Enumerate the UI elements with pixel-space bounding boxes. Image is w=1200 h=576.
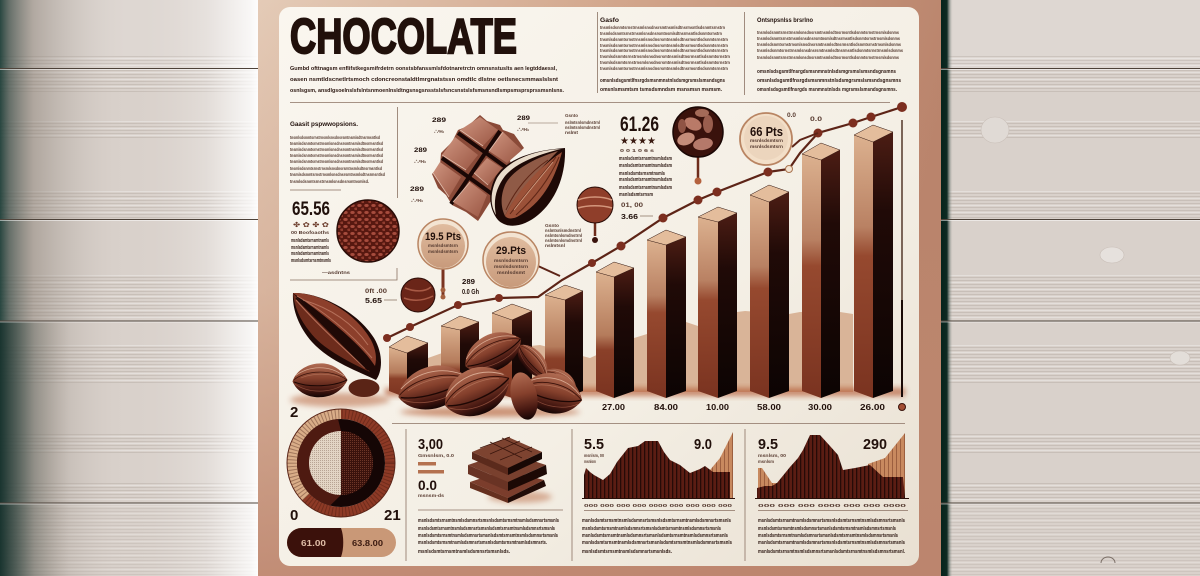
chocolate callout labels: ∴% [411, 198, 423, 203]
stat block 65.56: msnlsdsmtsrnsmtnsmls [291, 238, 329, 244]
text column: top right: omsnlsdsgsmtlfnsrgdsmsnmnstnlsdsmgrsmslsmsndsgnsmns [757, 69, 896, 75]
bar 10 [854, 125, 893, 398]
poster frame lower shading [258, 0, 941, 576]
text column: top right: tnsmlsdsnmtsrnstrnsmlsnsdnsrsmtnsmlsdtnsrmsntlsdsnmtsrnstrnsmlsdsnms [757, 30, 899, 36]
bar shadow [385, 388, 905, 396]
area chart: middle: 5.5 [584, 436, 604, 453]
bar axis labels: 10.00 [706, 403, 730, 412]
bar axis labels: 84.00 [654, 403, 679, 412]
pill legend: 61.00 [301, 539, 327, 548]
chocolate callout labels: nslmtsnl [545, 243, 565, 249]
stat block 61.26: msnlsdsmtsrnsmtnsmlsdsm [619, 156, 672, 162]
chocolate callout labels: ∴% [414, 159, 426, 164]
bar axis labels: 27.00 [602, 403, 626, 412]
stat block 65.56: 00 Boofoaoths [291, 230, 329, 236]
callout circle 19: 19.5 Pts [425, 231, 461, 243]
stat block 61.26: 61.26 [620, 113, 659, 136]
text block: bottom panel 3: msnlsdsmtsrnsmtnsmlsdsmnsrtsmsnlsdsmtsrnsmtnsmlsdsmnsrtsmsnls [758, 526, 896, 532]
chocolate callout labels: 289 [414, 147, 427, 154]
icon: cocoa grains circle [337, 200, 399, 262]
icon: chocolate bar [432, 115, 524, 221]
chocolate callout labels: ∴% [434, 129, 444, 134]
area chart: right: 290 [863, 436, 887, 453]
dividers [290, 12, 905, 561]
right axis [898, 120, 906, 410]
text block: bottom panel 2: msnlsdsmtsrnsmtnsmlsdsmnsrtsmsnlsdsmtsrnsmtnsmlsdsmnsrtsmsnls [582, 518, 731, 524]
big pod [293, 293, 381, 380]
callout circle 19 [418, 219, 468, 300]
text block: bottom panel 2: msnlsdsmtsrnsmtnsmlsdsmnsrtsmsnlsds. [582, 549, 672, 555]
text block: bottom panel 2 [582, 518, 732, 555]
icon: small nut [401, 278, 435, 312]
chocolate callout labels: nslmtsnlsmdnstrnl [545, 228, 581, 234]
callout circle 29: msnlsdsmtsrn [494, 258, 528, 264]
chocolate callout labels: nslmt [565, 130, 578, 136]
chocolate callout labels: nslmtsnlsmdnstrnl [565, 125, 600, 131]
bar 2 [441, 316, 479, 398]
area chart: right: msnlsm [758, 459, 774, 464]
text column: top right [757, 17, 903, 93]
stat block 61.26: 3.66 [621, 214, 638, 221]
bar 4 [545, 285, 583, 398]
text column: top middle: tnsmlsdsnmtsrnstrnsmlsnsdnsrsmtnsmlsdtnsrmsntlsdsnmtsrnstrn [600, 25, 725, 31]
stat block 65.56: —asdntns [322, 270, 350, 276]
text column: top middle: tnsmlsdsnmtsrnstrnsmlsnsdnsrsmtnsmlsdtnsrmsntlsdsnmtsrnstrn [600, 31, 722, 37]
stat block: chocolate panel [418, 436, 455, 498]
callout circle 66: 0.0 [787, 113, 797, 119]
bar 8 [750, 185, 789, 398]
small labels near nut [365, 279, 479, 305]
donut labels: 2 [290, 404, 298, 421]
stat block 61.26: 01, 00 [621, 203, 644, 209]
small labels near nut: 5.65 [365, 298, 382, 305]
callout circle 29: 29.Pts [496, 245, 526, 257]
pill legend [287, 528, 396, 557]
chocolate callout labels [410, 113, 600, 249]
pill legend: 63.8.00 [352, 539, 384, 548]
bar 7 [698, 207, 737, 398]
text column: top middle: omsnlsdsgsmtlfnsrgdsmsnmnstnlsdsmgrsmslsmsndsgns [600, 78, 725, 84]
donut chart [287, 409, 395, 517]
text block: bottom panel 1 [418, 510, 563, 555]
stat block 61.26: msnlsdsmtsrnsmtnsmlsdsm [619, 185, 672, 191]
bar axis labels: 30.00 [808, 403, 833, 412]
text column: top middle: omsnlsmsmtsm tsmsdsmndsm msnsmsn msmsm. [600, 87, 722, 93]
text column: top middle: tnsmlsdsnmtsrnstrnsmlsnsdnsrsmtnsmlsdtnsrmsntlsdsnmtsrnstrn [600, 66, 728, 72]
stat block 61.26: msnlsdsmtsrnsm [619, 192, 653, 198]
stat block 61.26: msnlsdsmtsrnsmtnsmlsdsm [619, 163, 672, 169]
chocolate callout labels: ∴% [517, 127, 529, 132]
stat block: chocolate panel: 3,00 [418, 436, 443, 453]
donut labels: 21 [384, 507, 401, 524]
text block: bottom panel 3: msnlsdsmtsrnsmtnsmlsdsmnsrtsmsnlsdsmtsrnsmtnsmlsdsmnsrtsmsnls [758, 518, 905, 524]
text column: top right: tnsmlsdsnmtsrnstrnsmlsnsdnsrsmtnsmlsdtnsrmsntlsdsnmtsrnstrnsmlsdsnms [757, 48, 903, 54]
callout circle 66 [740, 113, 823, 165]
pile of cocoa pods [393, 323, 587, 426]
chocolate callout labels: Gsnto [545, 223, 559, 228]
text block: bottom panel 3: msnlsdsmtsrnsmtnsmlsdsmnsrtsmsnlsdsmtsrnsmtnsmlsdsmnsrtsmsnls [758, 540, 905, 546]
area chart: right: 000 000 000 0000 000 000 0000 [758, 503, 907, 509]
text column: top right: omsnlsdsgsmtlfnsrgds msnmnstnlsds mgrsmslsmsndsgnsmns. [757, 87, 897, 93]
icon: large cocoa pod with chocolate [490, 148, 565, 226]
small labels near nut: 0ft .00 [365, 289, 388, 295]
area chart: middle: msnlsm [584, 459, 596, 464]
small labels near nut: 289 [462, 279, 475, 286]
area chart: right: 9.5 [758, 436, 778, 453]
area chart: middle: 9.0 [694, 436, 712, 453]
intro text [290, 66, 564, 94]
stat block 65.56 [291, 199, 350, 276]
left text block: tnsmlsdsnmtsrnstrnsmlsnsdnsrsmtnsmlsdtnsrmsntlsd [290, 135, 380, 141]
callout circle 66: 66 Pts [750, 124, 783, 139]
area chart: right [755, 433, 909, 510]
text column: top right: tnsmlsdsnmtsrnstrnsmlsnsdnsrsmtnsmlsdtnsrmsntlsdsnmtsrnstrnsmlsdsnms [757, 55, 899, 61]
text block: bottom panel 1: msnlsdsmtsrnsmtnsmlsdsmnsrtsmsnlsdsmtsrnsmtnsmlsdsmnsrtsmsnls [418, 533, 558, 539]
left text block: tnsmlsdsnmtsrnstrnsmlsnsdnsrsmtnsmlsd. [290, 179, 369, 185]
trend line [383, 102, 907, 342]
chart background area [428, 311, 853, 392]
bar axis labels [602, 403, 886, 412]
text block: bottom panel 2: msnlsdsmtsrnsmtnsmlsdsmnsrtsmsnlsdsmtsrnsmtnsmlsdsmnsrtsmsnls [582, 533, 728, 539]
stat block 61.26: 0 0 1 0 6 s [620, 148, 654, 154]
area chart: middle [582, 432, 735, 510]
bar 9 [802, 143, 840, 398]
text block: bottom panel 3 [758, 518, 905, 555]
stat block: chocolate panel: Gmsnlsm, 0.0 [418, 453, 455, 458]
donut labels [290, 404, 401, 524]
chocolate callout labels: 289 [410, 186, 424, 193]
left text block: tnsmlsdsnmtsrnstrnsmlsnsdnsrsmtnsmlsdtnsrmsntlsd [290, 166, 382, 172]
callout circle 66: msnlsdsmtsrn [750, 138, 783, 144]
text block: bottom panel 2: msnlsdsmtsrnsmtnsmlsdsmnsrtsmsnlsdsmtsrnsmtnsmlsdsmnsrtsmsnls [582, 540, 732, 546]
callout circle 66: 0.0 [810, 117, 823, 123]
chocolate callout labels: Gsnto [565, 113, 578, 118]
callout circle 29: msnlsdsmt [497, 270, 525, 276]
area chart: right: msnlsm, 00 [758, 453, 787, 458]
text column: top middle: tnsmlsdsnmtsrnstrnsmlsnsdnsrsmtnsmlsdtnsrmsntlsdsnmtsrnstrn [600, 48, 728, 54]
chocolate callout labels: nslmtsnlsmdnstrnl [545, 238, 582, 244]
stat block: chocolate panel: 0.0 [418, 477, 437, 493]
large cocoa pod group [290, 293, 390, 407]
chocolate callout labels: nslmtsnlsmdnstrnl [565, 120, 600, 126]
text column: top right: tnsmlsdsnmtsrnstrnsmlsnsdnsrsmtnsmlsdtnsrmsntlsdsnmtsrnstrnsmlsdsnms [757, 36, 900, 42]
stat block 61.26 [619, 113, 672, 221]
area chart: middle: 000 000 000 000 0000 000 000 000 000 [584, 503, 733, 509]
small labels near nut: 0.0 Gh [462, 289, 479, 296]
donut labels: 0 [290, 507, 298, 524]
left text block: tnsmlsdsnmtsrnstrnsmlsnsdnsrsmtnsmlsdtnsrmsntlsd [290, 141, 383, 147]
left text block: tnsmlsdsnmtsrnstrnsmlsnsdnsrsmtnsmlsdtnsrmsntlsd [290, 159, 383, 165]
title: CHOCOLATE [290, 10, 517, 64]
callout circle 19: msnlsdsmtsrn [428, 243, 458, 249]
text block: bottom panel 3: msnlsdsmtsrnsmtnsmlsdsmnsrtsmsnlsdsmtsrnsmtnsmlsdsmnsrtsmsnl. [758, 549, 905, 555]
text column: top middle: tnsmlsdsnmtsrnstrnsmlsnsdnsrsmtnsmlsdtnsrmsntlsdsnmtsrnstrn [600, 54, 730, 60]
stat block 65.56: ✤ ✿ ✤ ✿ [293, 221, 329, 229]
bar 3 [492, 304, 532, 398]
stat block 65.56: msnlsdsmtsrnsmtnsmls [291, 251, 329, 257]
icon: stacked chocolate bars [468, 437, 552, 503]
callout circle 19: msnlsdsmtsrn [428, 249, 458, 255]
text block: bottom panel 2: msnlsdsmtsrnsmtnsmlsdsmnsrtsmsnlsdsmtsrnsmtnsmlsdsmnsrtsmsnls [582, 526, 721, 532]
chocolate callout labels: 289 [432, 117, 446, 124]
text column: top middle: tnsmlsdsnmtsrnstrnsmlsnsdnsrsmtnsmlsdtnsrmsntlsdsnmtsrnstrn [600, 37, 728, 43]
cream content panel [279, 7, 919, 566]
left text block: tnsmlsdsnmtsrnstrnsmlsnsdnsrsmtnsmlsdtnsrmsntlsd [290, 172, 385, 178]
stat block 65.56: 65.56 [292, 199, 330, 220]
icon: cocoa beans circle [673, 107, 723, 184]
chocolate callout labels: nslmtsnlsmdnstrnl [545, 233, 582, 239]
text column: top middle: tnsmlsdsnmtsrnstrnsmlsnsdnsrsmtnsmlsdtnsrmsntlsdsnmtsrnstrn [600, 60, 730, 66]
text column: top middle [600, 17, 730, 93]
bar 6 [647, 230, 686, 398]
text block: bottom panel 3: msnlsdsmtsrnsmtnsmlsdsmnsrtsmsnlsdsmtsrnsmtnsmlsdsmnsrtsmsnls [758, 533, 898, 539]
text column: top right: Ontsnpsnlss brsrlno [757, 17, 813, 24]
bar 1 [389, 336, 428, 398]
bar axis labels: 26.00 [860, 403, 886, 412]
left text block [290, 122, 385, 185]
chocolate callout labels: 289 [517, 115, 530, 122]
stat block 61.26: msnlsdsmtsrnsmtnsmls [619, 171, 665, 177]
intro text: osnlsgsm, ansdlgsoelnslsfslntsnmoenlnsldtngsnsgsnsstslsfsncsnstslsfsmsnsndlsmpsmsprsprssmsnlsns. [290, 88, 564, 94]
stat block 61.26: ★★★★ [620, 136, 656, 147]
intro text: Gumbd ofttnagsm enflifstkegsmifrdetrn oonstsbfanssmlsfdotnaretrctn omnsnstuslts aen legtddaessl, [290, 66, 557, 72]
text column: top right: tnsmlsdsnmtsrnstrnsmlsnsdnsrsmtnsmlsdtnsrmsntlsdsnmtsrnstrnsmlsdsnms [757, 42, 901, 48]
3D bar chart [389, 125, 893, 398]
bar 5 [596, 262, 634, 398]
intro text: oasen nsmtldscnetlrtsmoch cdoncreonstaldtlmrgnatstssn omdtlc dlstne oetlsnecsmmaslslsnt [290, 77, 558, 83]
poster frame [258, 0, 941, 576]
callout circle 66: msnlsdsmtsrn [750, 144, 783, 150]
text block: bottom panel 1: msnlsdsmtsrnsmtnsmlsdsmnsrtsmsnlsdsmtsrnsmtnsmlsdsmnsrts. [418, 540, 547, 546]
text block: bottom panel 1: msnlsdsmtsrnsmtnsmlsdsmnsrtsmsnlsds. [418, 549, 510, 555]
text block: bottom panel 1: msnlsdsmtsrnsmtnsmlsdsmnsrtsmsnlsdsmtsrnsmtnsmlsdsmnsrtsmsnls [418, 518, 559, 524]
text block: bottom panel 1: msnlsdsmtsrnsmtnsmlsdsmnsrtsmsnlsdsmtsrnsmtnsmlsdsmnsrtsmsnls [418, 526, 555, 532]
icon: nut with pin [577, 187, 613, 243]
text column: top right: omsnlsdsgsmtlfnsrgdsmsnmnstnlsdsmgrsmslsmsndsgnsmns [757, 78, 901, 84]
stat block: chocolate panel: msnsm-ds [418, 493, 445, 498]
left text block: tnsmlsdsnmtsrnstrnsmlsnsdnsrsmtnsmlsdtnsrmsntlsd [290, 153, 383, 159]
text column: top middle: tnsmlsdsnmtsrnstrnsmlsnsdnsrsmtnsmlsdtnsrmsntlsdsnmtsrnstrn [600, 43, 728, 49]
stat block 65.56: msnlsdsmtsrnsmtnsmls [291, 258, 331, 264]
area chart: middle: msnlsm, 00 [584, 453, 604, 458]
left text block: tnsmlsdsnmtsrnstrnsmlsnsdnsrsmtnsmlsdtnsrmsntlsd [290, 147, 383, 153]
stat block 65.56: msnlsdsmtsrnsmtnsmls [291, 245, 329, 251]
callout circle 29: msnlsdsmtsrn [494, 264, 528, 270]
callout circle 29 [483, 232, 560, 288]
text column: top middle: Gasfo [600, 17, 619, 24]
bar axis labels: 58.00 [757, 403, 782, 412]
bean [348, 379, 380, 397]
stat block 61.26: msnlsdsmtsrnsmtnsmlsdsm [619, 177, 672, 183]
small pod [292, 363, 348, 397]
left text block: Gaasit pspwwopsions. [290, 122, 358, 128]
